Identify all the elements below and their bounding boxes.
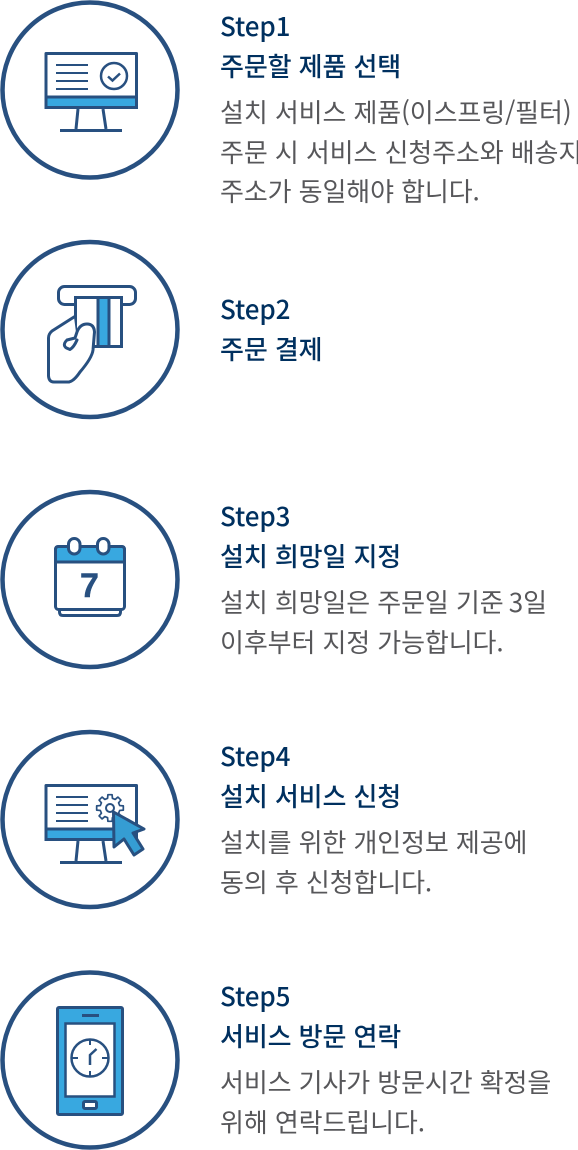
step 2 text	[220, 290, 322, 367]
step 4 description	[220, 823, 527, 900]
step 3 description: 설치 희망일은 주문일 기준 3일	[220, 583, 547, 620]
calendar number: 7	[80, 567, 99, 605]
step 1 label: Step1	[220, 7, 290, 44]
step 2 label: Step2	[220, 290, 290, 327]
step 1 heading: 주문할 제품 선택	[220, 47, 401, 84]
step 5 text	[220, 977, 551, 1140]
step 2 heading: 주문 결제	[220, 330, 322, 367]
step 5 description	[220, 1063, 551, 1140]
step 4 description: 설치를 위한 개인정보 제공에	[220, 823, 527, 860]
step 3 description: 이후부터 지정 가능합니다.	[220, 623, 504, 660]
icon: monitor with gear and cursor	[2, 732, 178, 907]
step 1 description: 주문 시 서비스 신청주소와 배송지	[220, 133, 578, 170]
icon: hand inserting card	[2, 242, 178, 417]
step 5 description: 서비스 기사가 방문시간 확정을	[220, 1063, 551, 1100]
icon: smartphone with clock	[2, 972, 178, 1148]
step 1 description: 주소가 동일해야 합니다.	[220, 172, 480, 209]
step 4 text	[220, 737, 527, 900]
step 3 heading: 설치 희망일 지정	[220, 537, 401, 574]
step 3 label: Step3	[220, 497, 290, 534]
step 1 description	[220, 93, 578, 209]
step 3 text	[220, 497, 547, 660]
step 4 label: Step4	[220, 737, 290, 774]
step 4 description: 동의 후 신청합니다.	[220, 863, 432, 900]
step 5 description: 위해 연락드립니다.	[220, 1103, 425, 1140]
icon: monitor with check mark	[2, 2, 178, 178]
step 5 heading: 서비스 방문 연락	[220, 1017, 401, 1054]
icon: calendar	[2, 492, 178, 667]
step 3 description	[220, 583, 547, 660]
step 4 heading: 설치 서비스 신청	[220, 777, 401, 814]
step 1 description: 설치 서비스 제품(이스프링/필터)	[220, 93, 572, 130]
step 1 text	[220, 7, 578, 209]
step 5 label: Step5	[220, 977, 290, 1014]
